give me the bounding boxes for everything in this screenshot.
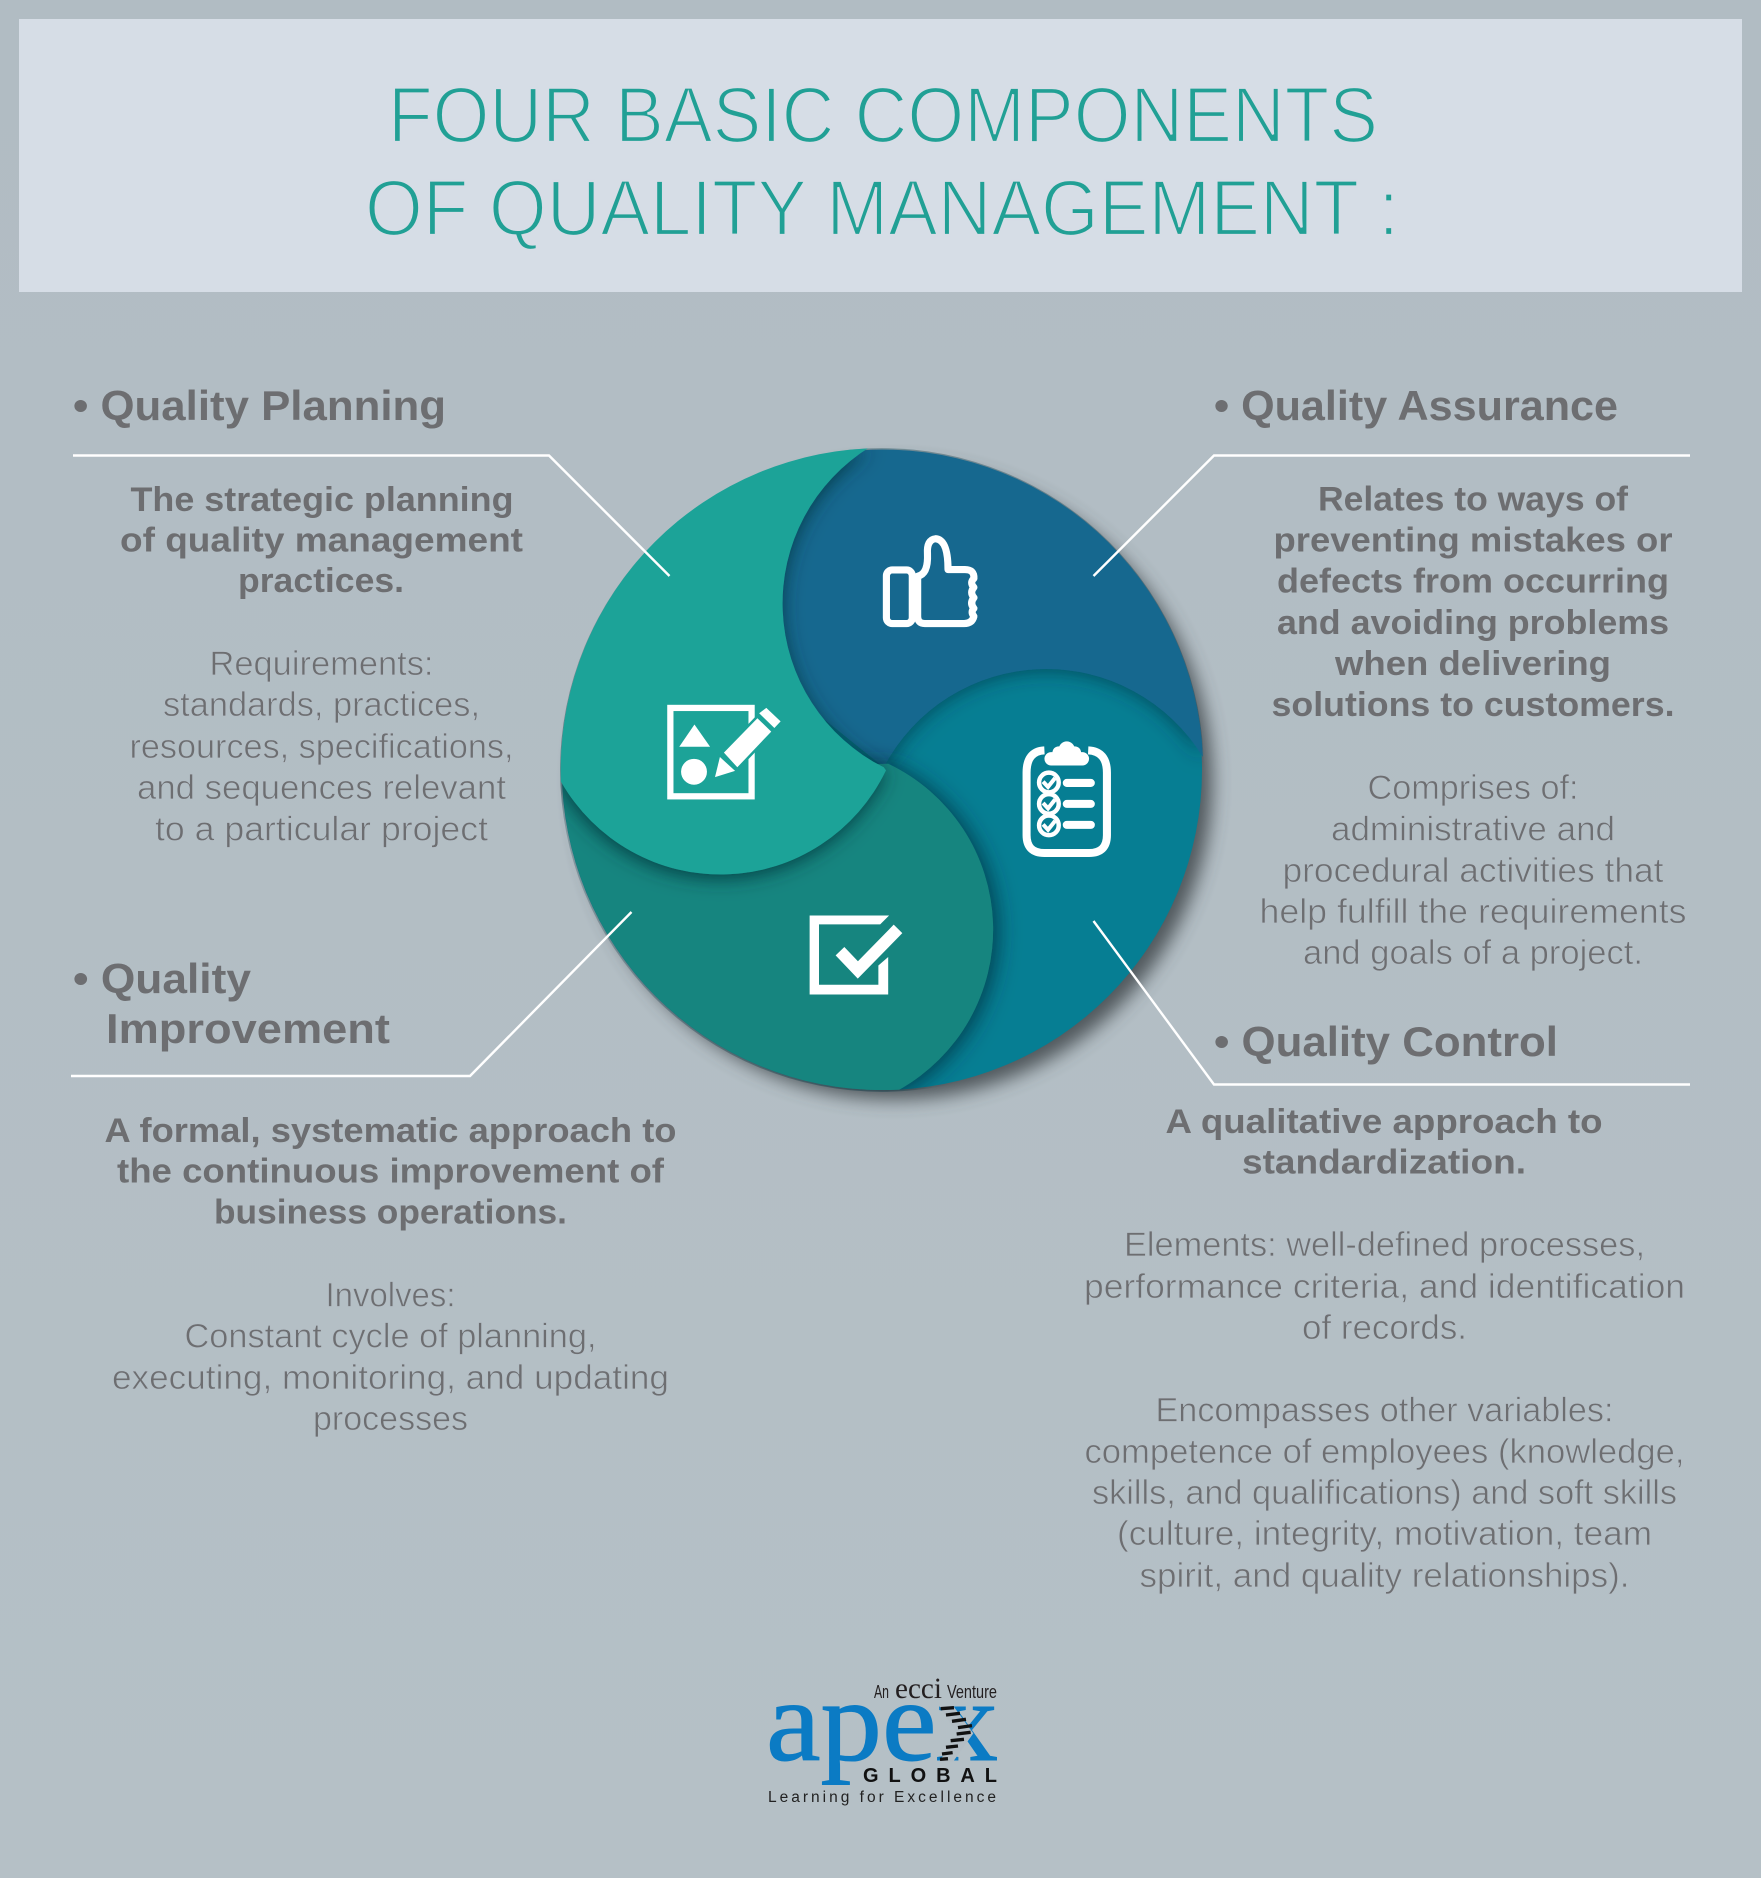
variables text: skills, and qualifications) and soft skills xyxy=(1092,1474,1677,1512)
segment: quality assurance xyxy=(782,448,1203,765)
bold description: A qualitative approach to xyxy=(1166,1103,1602,1141)
bold description: practices. xyxy=(238,562,404,600)
bold description: The strategic planning xyxy=(130,481,514,519)
segment: quality improvement xyxy=(562,764,993,1090)
variables text: spirit, and quality relationships). xyxy=(1140,1557,1630,1595)
bold description: of quality management xyxy=(120,522,524,560)
requirements text: to a particular project xyxy=(155,810,489,848)
comprises text: help fulfill the requirements xyxy=(1260,893,1686,931)
involves text: executing, monitoring, and updating xyxy=(112,1359,669,1397)
heading: • Quality Assurance xyxy=(1214,382,1618,429)
bold description: preventing mistakes or xyxy=(1274,522,1672,560)
heading: • Quality Planning xyxy=(73,382,446,429)
comprises text: administrative and xyxy=(1331,810,1615,848)
elements text: performance criteria, and identification xyxy=(1084,1268,1685,1306)
icon: shapes and pencil xyxy=(670,708,781,796)
requirements text: Requirements: xyxy=(210,645,434,683)
panel: quality improvement xyxy=(73,955,676,1438)
comprises text: Comprises of: xyxy=(1368,769,1578,807)
bold description: and avoiding problems xyxy=(1277,604,1669,642)
bold description: Relates to ways of xyxy=(1318,480,1629,518)
tagline: learning for excellence: Learning for Excellence xyxy=(768,1789,996,1806)
segment: quality planning xyxy=(561,447,886,875)
involves text: processes xyxy=(313,1400,468,1438)
connector lines xyxy=(71,456,1690,1084)
bold description xyxy=(104,1112,676,1232)
wordmark: global: GLOBAL xyxy=(863,1765,997,1787)
bold description xyxy=(1272,480,1674,724)
segment: quality control xyxy=(562,450,1202,1090)
title banner xyxy=(19,19,1742,292)
pie outer shadow xyxy=(577,464,1212,1099)
elements text: Elements: well-defined processes, xyxy=(1124,1226,1645,1264)
tagline: an ecci venture: An xyxy=(874,1682,889,1702)
heading xyxy=(73,955,390,1052)
tagline: an ecci venture: ecci xyxy=(895,1672,942,1705)
bold description xyxy=(120,481,524,600)
swirl pie diagram xyxy=(561,447,1212,1099)
bold description: A formal, systematic approach to xyxy=(104,1112,676,1150)
requirements text: and sequences relevant xyxy=(137,769,507,807)
x stripes xyxy=(939,1706,973,1761)
elements text: of records. xyxy=(1302,1309,1467,1347)
requirements text: resources, specifications, xyxy=(130,728,514,766)
icon: clipboard checklist xyxy=(1027,741,1107,853)
heading: Improvement xyxy=(106,1005,390,1052)
bold description: business operations. xyxy=(214,1194,567,1232)
comprises text: and goals of a project. xyxy=(1303,934,1643,972)
heading: • Quality Control xyxy=(1214,1018,1558,1065)
icon: thumbs up xyxy=(886,539,974,624)
elements text xyxy=(1084,1226,1685,1347)
variables text: (culture, integrity, motivation, team xyxy=(1117,1515,1652,1553)
logo: apex global xyxy=(766,1658,998,1806)
title: FOUR BASIC COMPONENTS xyxy=(388,70,1378,159)
involves text xyxy=(112,1276,669,1438)
variables text: competence of employees (knowledge, xyxy=(1084,1433,1684,1471)
icon: check box xyxy=(810,916,898,995)
title xyxy=(365,70,1399,252)
bold description: when delivering xyxy=(1334,645,1611,683)
tagline: an ecci venture xyxy=(874,1672,997,1705)
requirements text xyxy=(130,645,514,848)
bold description: standardization. xyxy=(1242,1144,1526,1182)
panel: quality control xyxy=(1084,1018,1685,1595)
panel: quality assurance xyxy=(1214,382,1686,972)
requirements text: standards, practices, xyxy=(163,686,480,724)
bold description: solutions to customers. xyxy=(1272,686,1674,724)
involves text: Involves: xyxy=(326,1276,456,1314)
title: OF QUALITY MANAGEMENT : xyxy=(365,163,1399,252)
bold description: defects from occurring xyxy=(1277,562,1669,600)
bold description xyxy=(1166,1103,1602,1182)
comprises text xyxy=(1260,769,1686,972)
wordmark: apex: apex xyxy=(766,1658,998,1786)
involves text: Constant cycle of planning, xyxy=(184,1318,596,1356)
heading: • Quality xyxy=(73,955,252,1002)
tagline: an ecci venture: Venture xyxy=(947,1682,997,1702)
banner panel xyxy=(19,19,1742,292)
bold description: the continuous improvement of xyxy=(117,1152,665,1190)
comprises text: procedural activities that xyxy=(1282,852,1664,890)
panel: quality planning xyxy=(73,382,524,848)
variables text: Encompasses other variables: xyxy=(1156,1392,1614,1430)
variables text xyxy=(1084,1392,1684,1595)
